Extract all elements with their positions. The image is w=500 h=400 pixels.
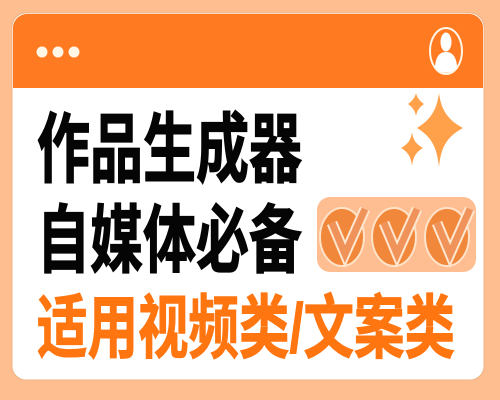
small top sparkle [408,93,424,116]
check icon 3 [425,208,470,266]
check icon 2 [372,208,417,266]
badge background [317,197,476,272]
small lower sparkle [401,132,423,166]
window control dots [36,46,80,58]
subtitle: 适用视频类/文案类 [37,289,455,367]
check icon 1 [320,208,365,266]
icon: user avatar [430,28,462,74]
title line 2: 自媒体必备 [37,199,302,282]
large sparkle [417,93,463,167]
icon: sparkles [401,93,463,167]
window title bar [13,14,483,88]
check badges [317,197,476,272]
title line 1: 作品生成器 [37,107,302,192]
